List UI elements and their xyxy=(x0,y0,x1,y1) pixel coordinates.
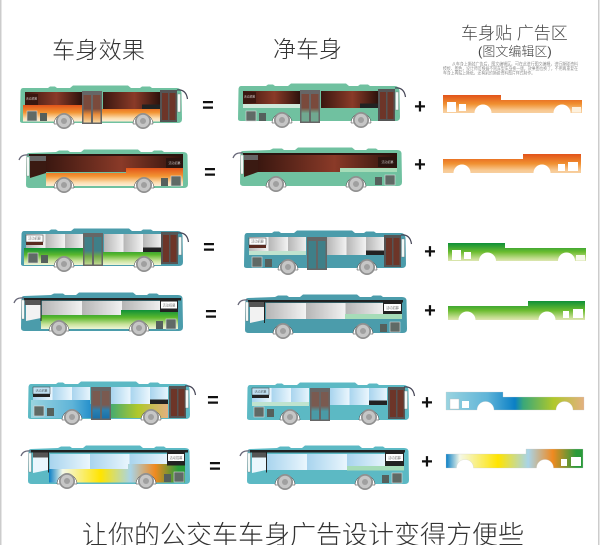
description text xyxy=(443,60,579,76)
equals 1: = xyxy=(202,95,214,117)
ad panel 3 xyxy=(448,243,586,261)
page edge: left xyxy=(0,0,2,545)
bus 6 effect: rainbow ad xyxy=(21,446,190,489)
bus 5 clean: 活动招募 xyxy=(254,388,267,394)
bus 3 effect: green ad: 活动招募 xyxy=(28,236,42,240)
bus 6 clean: 活动招募 xyxy=(388,455,402,460)
plus 4: + xyxy=(424,300,436,322)
heading: 净车身: 净车身 xyxy=(273,36,342,62)
bus 6 clean xyxy=(240,446,409,490)
description text: 车身上再贴上撕纸。还有别的撕碰资料图片样式制作。 xyxy=(443,70,535,76)
sub heading: 图文编辑区: (图文编辑区) xyxy=(478,44,552,59)
equals 4: = xyxy=(205,304,217,326)
ad panel 6 xyxy=(446,449,583,468)
equals 3: = xyxy=(203,237,215,259)
bus 5 clean xyxy=(247,382,414,425)
description text: 从车身上撕掉广告后，图文编辑区，可在此进行图文编辑，进行撕碰资料 xyxy=(452,60,579,68)
ad panel 2 xyxy=(443,154,581,173)
heading: 车身贴 广告区: 车身贴 广告区 xyxy=(461,24,568,43)
heading: 车身效果: 车身效果 xyxy=(52,37,145,63)
ad panel 4 xyxy=(448,301,585,320)
bus 2 clean xyxy=(233,148,402,192)
ad panel 1 xyxy=(443,95,582,113)
plus 1: + xyxy=(414,96,426,118)
plus 3: + xyxy=(424,241,436,263)
bus 1 effect: orange ad: 活动招募 xyxy=(26,96,37,100)
bus 4 clean xyxy=(238,294,407,339)
ad panel 5 xyxy=(446,392,584,410)
bus 2 effect: orange ad xyxy=(19,150,188,193)
bus 2 clean: 活动招募 xyxy=(381,159,394,164)
page edge: right xyxy=(598,0,600,545)
bus 3 clean xyxy=(244,230,412,275)
plus 2: + xyxy=(414,154,426,176)
plus 5: + xyxy=(421,392,433,414)
equals 2: = xyxy=(204,162,216,184)
bus 5 effect: blue ad xyxy=(28,382,196,425)
bus 4 clean: 活动招募 xyxy=(386,305,400,310)
bus 3 clean: 活动招募 xyxy=(251,238,265,244)
bus 4 effect: green ad: 活动招募 xyxy=(163,302,176,308)
bus 1 effect: orange ad xyxy=(20,86,188,129)
equals 6: = xyxy=(209,456,221,478)
bus 2 effect: orange ad: 活动招募 xyxy=(168,160,181,165)
bus 1 clean xyxy=(238,84,406,128)
bus 3 effect: green ad xyxy=(21,228,188,272)
bus 4 effect: green ad xyxy=(14,292,183,336)
plus 6: + xyxy=(421,451,433,473)
bus 5 effect: blue ad: 活动招募 xyxy=(35,388,48,392)
description text: 模板、图色，设计师可根据不同车型车身换一版，效果图也换了，不用再重复在 xyxy=(443,65,579,72)
bus 1 clean: 活动招募 xyxy=(244,94,255,98)
bus 6 effect: rainbow ad: 活动招募 xyxy=(170,455,183,460)
equals 5: = xyxy=(207,390,219,412)
